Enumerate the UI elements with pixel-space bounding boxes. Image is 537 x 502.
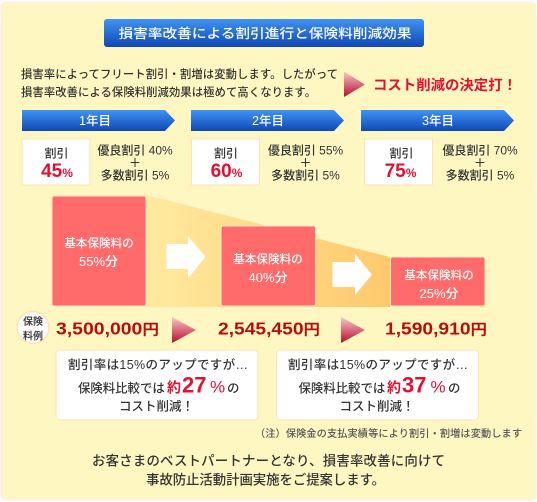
year 3 discount breakdown: ＋ bbox=[474, 156, 486, 170]
year 1 premium block bbox=[52, 196, 146, 306]
year 2 discount breakdown: ＋ bbox=[299, 156, 312, 170]
intro text bbox=[21, 67, 338, 99]
year 2 discount breakdown: 優良割引 55% bbox=[268, 142, 344, 158]
year 2 column bbox=[191, 110, 344, 185]
year 2 discount breakdown bbox=[268, 142, 344, 182]
closing message: お客さまのベストパートナーとなり、損害率改善に向けて bbox=[92, 452, 445, 468]
year 2 banner: 2年目 bbox=[252, 114, 284, 128]
intro text: 損害率によってフリート割引・割増は変動します。したがって bbox=[21, 67, 338, 81]
savings callout 1 bbox=[56, 350, 258, 420]
year 3 premium block bbox=[390, 257, 485, 306]
funnel chart bbox=[52, 195, 485, 307]
footnote: （注）保険金の支払実績等により割引・割増は変動します bbox=[255, 427, 522, 440]
funnel background wedge bbox=[146, 195, 390, 307]
year 2 discount box: 割引 bbox=[214, 146, 238, 160]
year 3 discount breakdown bbox=[442, 142, 518, 182]
arrow between amounts 2 bbox=[341, 317, 365, 343]
premium amount year 2: 2,545,450 円 bbox=[218, 318, 320, 338]
savings callout 2: % bbox=[430, 378, 446, 396]
savings callout 1: 割引率は15%のアップですが… bbox=[68, 357, 248, 372]
premium example badge bbox=[17, 312, 49, 344]
title banner: 損害率改善による割引進行と保険料削減効果 bbox=[118, 25, 412, 41]
year 3 premium block: 25%分 bbox=[419, 286, 459, 301]
year 1 premium block: 55%分 bbox=[79, 254, 118, 269]
year 2 premium block bbox=[221, 226, 316, 306]
year 1 discount breakdown: 多数割引 5% bbox=[101, 168, 170, 182]
year 1 discount box: 45% bbox=[41, 161, 73, 182]
year 2 discount box: 60% bbox=[211, 161, 243, 182]
premium example badge: 保険 bbox=[23, 315, 43, 328]
closing message bbox=[92, 452, 445, 488]
year 2 premium block: 基本保険料の bbox=[233, 252, 303, 266]
savings callout 2: 保険料比較では bbox=[298, 380, 385, 396]
year 3 column bbox=[361, 110, 518, 185]
year 1 banner bbox=[22, 110, 175, 131]
year 3 discount box bbox=[364, 139, 432, 185]
year 3 discount breakdown: 優良割引 70% bbox=[442, 142, 518, 158]
year 3 banner bbox=[361, 110, 514, 131]
savings callout 1: 保険料比較では bbox=[78, 380, 165, 396]
callout headline: コスト削減の決定打！ bbox=[373, 76, 517, 94]
year 2 discount box bbox=[192, 139, 260, 185]
savings callout 1: の bbox=[227, 382, 239, 396]
savings callout 1: % bbox=[210, 378, 225, 396]
savings callout 2: の bbox=[448, 382, 460, 396]
year 2 banner bbox=[191, 110, 344, 131]
arrow between amounts 1 bbox=[172, 317, 196, 343]
savings callout 1: 約 bbox=[167, 380, 181, 396]
closing message: 事故防止活動計画実施をご提案します。 bbox=[146, 472, 385, 488]
year 1 discount breakdown bbox=[97, 142, 173, 182]
year 1 discount box bbox=[22, 139, 90, 185]
savings callout 2: コスト削減！ bbox=[339, 398, 415, 414]
premium amount year 1: 3,500,000 円 bbox=[56, 318, 159, 338]
year 1 discount breakdown: 優良割引 40% bbox=[97, 142, 173, 158]
year 3 discount box: 75% bbox=[385, 161, 417, 182]
year 1 column bbox=[22, 110, 175, 185]
year 1 banner: 1年目 bbox=[79, 114, 111, 128]
year 3 banner: 3年目 bbox=[422, 114, 454, 128]
year 1 discount box: 割引 bbox=[44, 146, 69, 160]
savings callout 1: 27 bbox=[182, 372, 206, 398]
intro text: 損害率改善による保険料削減効果は極めて高くなります。 bbox=[21, 85, 316, 99]
savings callout 2 bbox=[276, 350, 478, 420]
year 2 discount breakdown: 多数割引 5% bbox=[271, 168, 340, 182]
savings callout 2: 割引率は15%のアップですが… bbox=[288, 357, 468, 372]
year 1 discount breakdown: ＋ bbox=[129, 156, 141, 170]
year 3 premium block: 基本保険料の bbox=[404, 268, 474, 282]
title banner bbox=[104, 19, 424, 47]
savings callout 2: 約 bbox=[387, 380, 401, 396]
icon: white arrow 1 bbox=[166, 236, 206, 278]
year 3 discount box: 割引 bbox=[389, 146, 414, 160]
icon: white arrow 2 bbox=[332, 254, 372, 295]
year 3 discount breakdown: 多数割引 5% bbox=[446, 168, 515, 182]
icon: callout arrow bbox=[344, 72, 365, 97]
savings callout 2: 37 bbox=[402, 372, 426, 398]
savings callout 1: コスト削減！ bbox=[119, 398, 194, 414]
premium example badge: 料例 bbox=[23, 330, 43, 342]
premium amount year 3: 1,590,910 円 bbox=[385, 318, 487, 338]
year 1 premium block: 基本保険料の bbox=[64, 236, 134, 250]
year 2 premium block: 40%分 bbox=[248, 270, 288, 285]
